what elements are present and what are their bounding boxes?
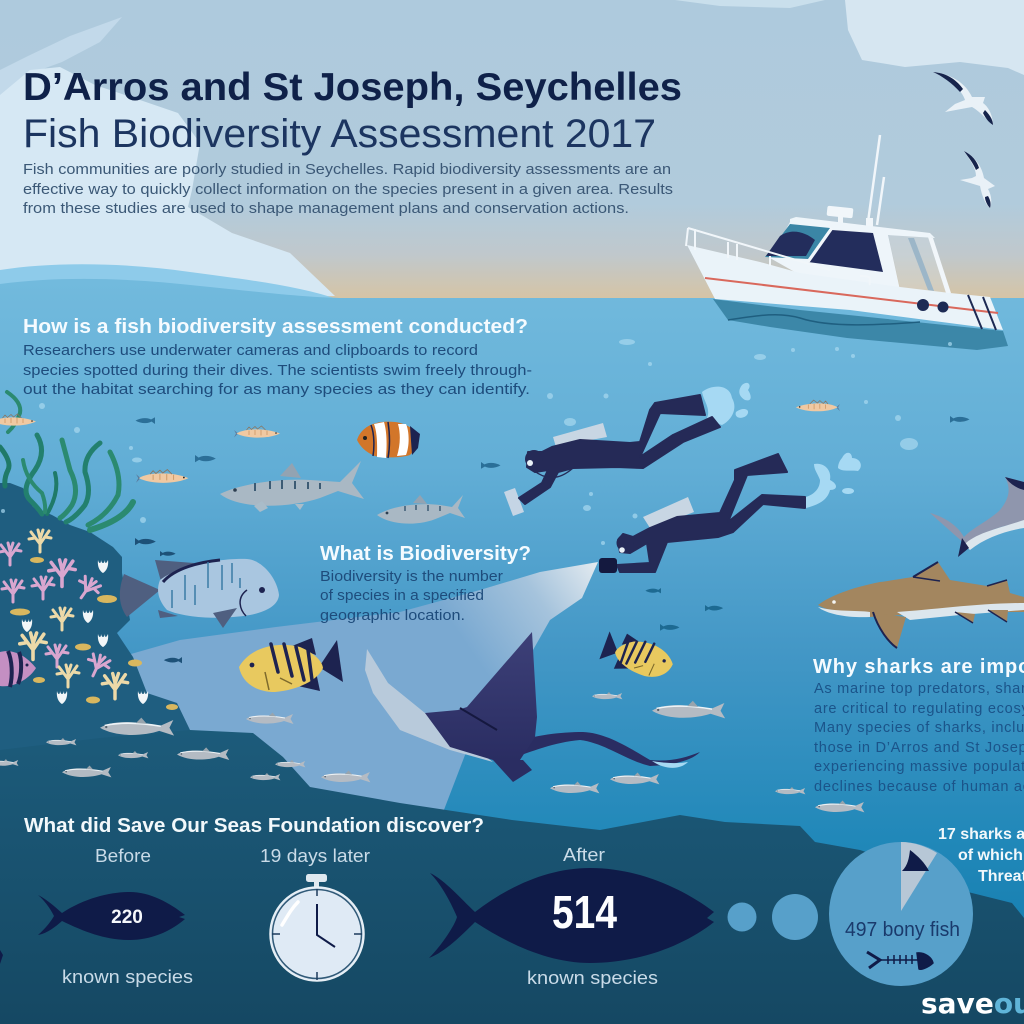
reflection bbox=[713, 299, 1008, 350]
head and mask bbox=[525, 450, 543, 468]
section body: how conducted: Researchers use underwater cameras and clipboards to record bbox=[23, 343, 478, 359]
light beam from dive torch bbox=[117, 562, 598, 815]
yellow fish 1 bbox=[239, 638, 343, 692]
clipboard bbox=[504, 488, 524, 516]
dark wing body bbox=[425, 632, 537, 760]
subtitle: Fish Biodiversity Assessment 2017 bbox=[23, 112, 656, 156]
bottom section heading: What did Save Our Seas Foundation discover? bbox=[24, 815, 484, 837]
label: known species before: known species bbox=[62, 967, 193, 987]
icon: fish skeleton bbox=[867, 952, 933, 969]
head lobe bbox=[493, 760, 532, 782]
pie chart: bony fish vs sharks bbox=[829, 842, 973, 986]
cabin roof and wall bbox=[770, 217, 935, 290]
diver body bbox=[617, 454, 805, 572]
fin wash bubbles bbox=[806, 453, 861, 508]
seaweed bbox=[0, 392, 133, 530]
section body: how conducted: out the habitat searching for as many species as they can identify. bbox=[23, 382, 530, 398]
antennas bbox=[868, 135, 884, 225]
head and mask bbox=[616, 534, 634, 552]
section body: how conducted bbox=[23, 343, 532, 398]
radar bbox=[827, 206, 873, 227]
label: 19 days later: 19 days later bbox=[260, 846, 370, 866]
small navy fish with 220: 220 bbox=[111, 907, 143, 928]
body: what is biodiversity: geographic location. bbox=[320, 608, 465, 624]
thought bubble dots bbox=[728, 894, 818, 940]
fin wash bubbles bbox=[702, 383, 751, 425]
icon: stopwatch bbox=[270, 874, 364, 981]
section body: how conducted: species spotted during their dives. The scientists swim freely through- bbox=[23, 363, 532, 379]
sea: upper left wave bbox=[0, 264, 340, 300]
lemon shark bbox=[818, 562, 1024, 648]
large navy fish with 514 bbox=[429, 868, 714, 963]
tail fragment at left edge bbox=[0, 950, 3, 964]
perch fish bbox=[0, 400, 840, 483]
boat bbox=[686, 135, 1008, 350]
label: before: Before bbox=[95, 846, 151, 866]
barracuda small bbox=[377, 495, 465, 524]
cloud: top middle bbox=[675, 0, 825, 8]
tank bbox=[553, 423, 607, 447]
small dark fish school bbox=[135, 416, 970, 663]
intro paragraph bbox=[23, 162, 673, 217]
hull bbox=[687, 245, 1003, 330]
stern stripes bbox=[968, 295, 996, 330]
rear cabin window bbox=[888, 234, 950, 293]
regulator hose bbox=[533, 468, 573, 478]
body: what is biodiversity: of species in a specified bbox=[320, 588, 484, 604]
large navy fish with 514: 514 bbox=[552, 886, 617, 938]
corals on reef bbox=[0, 530, 178, 710]
barracuda large bbox=[220, 461, 364, 512]
small navy fish with 220 bbox=[38, 892, 185, 940]
diver body bbox=[519, 395, 720, 504]
tail wash bbox=[652, 761, 688, 768]
yellow fish 2 bbox=[598, 629, 677, 681]
parrotfish bbox=[120, 559, 279, 628]
intro paragraph: from these studies are used to shape management plans and conservation actions. bbox=[23, 201, 629, 217]
torch bbox=[599, 558, 617, 573]
portholes bbox=[917, 299, 948, 312]
reef rock bbox=[0, 483, 190, 750]
silver fish school bbox=[0, 692, 864, 812]
tank bbox=[643, 497, 694, 528]
rails bbox=[686, 228, 870, 285]
shark text body bbox=[814, 681, 1024, 795]
cloud: left wisp bbox=[0, 17, 122, 110]
cloud: top right bbox=[845, 0, 1024, 75]
intro paragraph: Fish communities are poorly studied in Seychelles. Rapid biodiversity assessments are an bbox=[23, 162, 671, 178]
body: what is biodiversity: Biodiversity is the number bbox=[320, 569, 503, 585]
diver with clipboard bbox=[504, 383, 751, 516]
pie slice: sharks bbox=[901, 842, 937, 911]
seabed bbox=[0, 700, 1024, 1024]
purple fish bbox=[0, 651, 36, 687]
body: what is biodiversity bbox=[320, 569, 503, 624]
grey shark bbox=[930, 477, 1024, 557]
main title: D’Arros and St Joseph, Seychelles bbox=[23, 66, 682, 109]
label: known species after: known species bbox=[527, 968, 658, 988]
sharks and rays note bbox=[938, 826, 1024, 885]
label: after: After bbox=[563, 845, 605, 865]
label: bony fish: 497 bony fish bbox=[845, 919, 960, 941]
tail bbox=[510, 732, 700, 766]
icon: seabird 1 bbox=[933, 72, 993, 125]
windshield bbox=[808, 230, 883, 272]
red stripe bbox=[705, 278, 998, 313]
cloud: left large bbox=[0, 67, 335, 300]
light underside wing bbox=[365, 649, 493, 762]
front glass bbox=[765, 224, 830, 259]
diver with torch bbox=[599, 453, 861, 573]
icon: seabird 2 bbox=[960, 151, 995, 208]
manta ray bbox=[365, 632, 700, 782]
sky background bbox=[0, 0, 1024, 300]
icon: shark fin bbox=[902, 850, 929, 871]
intro paragraph: effective way to quickly collect information on the species present in a given area. Results bbox=[23, 182, 673, 198]
clownfish bbox=[357, 422, 420, 458]
heading: what is biodiversity: What is Biodiversity? bbox=[320, 543, 531, 565]
sea: water body bbox=[0, 279, 1024, 1024]
surface bubbles bbox=[1, 339, 964, 545]
section heading: how conducted: How is a fish biodiversity assessment conducted? bbox=[23, 316, 528, 338]
